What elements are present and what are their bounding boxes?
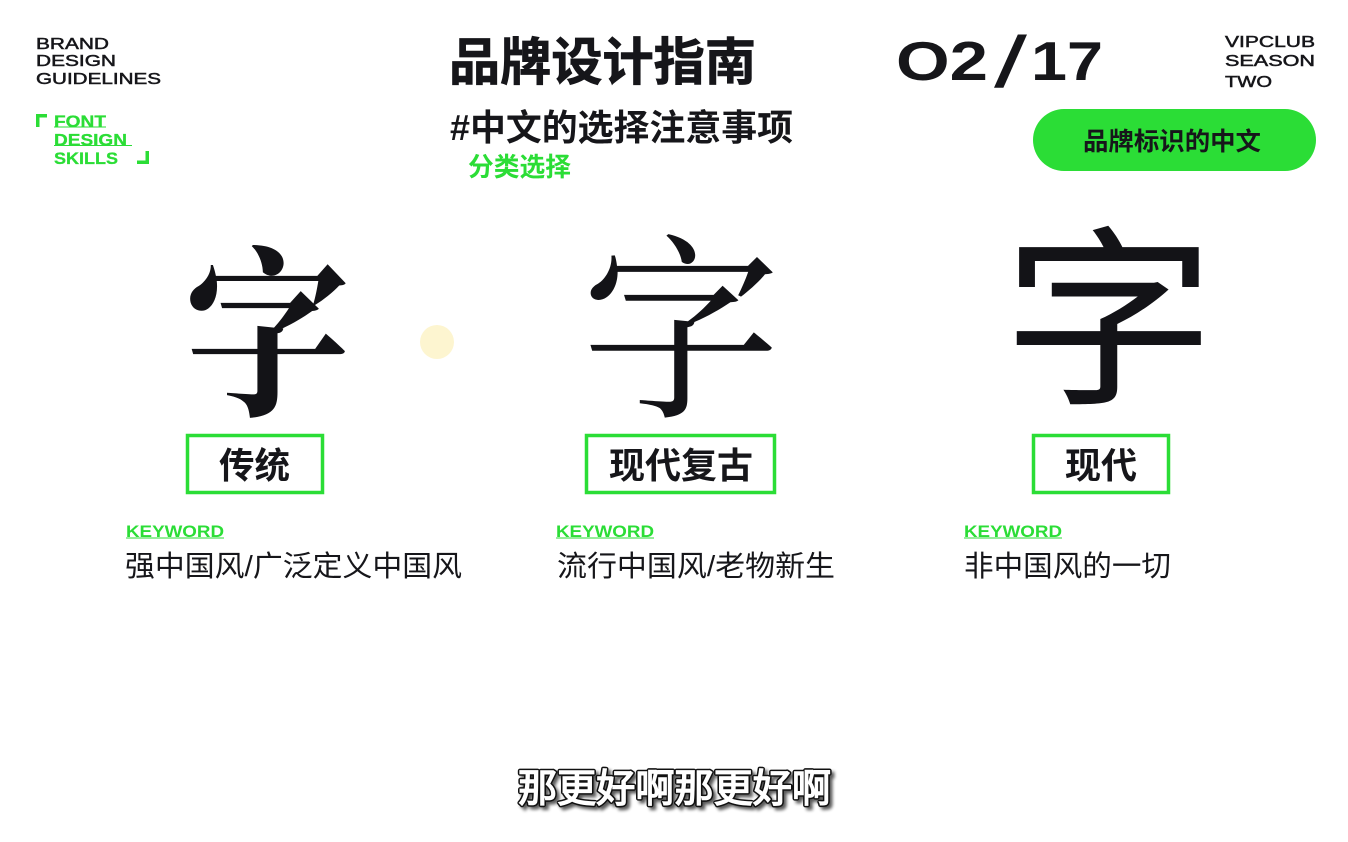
category box: modern retro: 现代复古 <box>609 445 753 486</box>
vipclub season two label: SEASON <box>1225 53 1315 70</box>
font design skills tag: FONT <box>54 112 107 131</box>
category box: modern retro <box>586 436 774 492</box>
pill: brand chinese <box>1033 109 1316 171</box>
font design skills tag: DESIGN <box>54 130 127 150</box>
keyword block: traditional: 强中国风/广泛定义中国风 <box>125 550 462 583</box>
page number: 17 <box>1031 30 1103 92</box>
font design skills tag <box>36 112 149 168</box>
keyword block: modern: KEYWORD <box>964 522 1062 541</box>
video caption: 那更好啊那更好啊 <box>518 768 831 811</box>
brand guidelines label: DESIGN <box>36 53 116 70</box>
decorative dot <box>420 325 454 359</box>
vipclub season two label: TWO <box>1225 74 1272 91</box>
keyword block: modern retro <box>556 522 835 583</box>
page number <box>896 23 1103 103</box>
big glyph: modern style: 字 <box>1002 216 1216 431</box>
keyword block: modern retro: 流行中国风/老物新生 <box>557 550 835 583</box>
big glyph: modern retro style: 字 <box>581 225 781 446</box>
vipclub season two label: VIPCLUB <box>1225 34 1315 51</box>
keyword block: modern <box>964 522 1171 583</box>
pill: brand chinese: 品牌标识的中文 <box>1083 128 1261 156</box>
category box: traditional <box>188 436 322 492</box>
keyword block: traditional <box>125 522 462 583</box>
section label: 分类选择 <box>468 152 571 182</box>
subtitle: #中文的选择注意事项 <box>450 107 793 148</box>
keyword block: modern retro: KEYWORD <box>556 522 654 541</box>
brand guidelines label: BRAND <box>36 36 109 53</box>
vipclub season two label <box>1225 34 1315 91</box>
video caption: 那更好啊那更好啊 <box>518 768 831 811</box>
keyword block: modern: 非中国风的一切 <box>964 550 1171 583</box>
font design skills tag: SKILLS <box>54 149 118 168</box>
category box: modern: 现代 <box>1065 445 1137 486</box>
title: 品牌设计指南 <box>449 34 756 91</box>
video caption: 那更好啊那更好啊 <box>521 771 834 814</box>
category box: modern <box>1034 436 1168 492</box>
brand guidelines label: GUIDELINES <box>36 71 161 88</box>
page number: / <box>994 23 1027 103</box>
brand guidelines label <box>36 36 161 88</box>
big glyph: traditional style: 字 <box>185 237 351 441</box>
keyword block: traditional: KEYWORD <box>126 522 224 541</box>
category box: traditional: 传统 <box>219 445 290 486</box>
page number: O2 <box>896 30 988 92</box>
